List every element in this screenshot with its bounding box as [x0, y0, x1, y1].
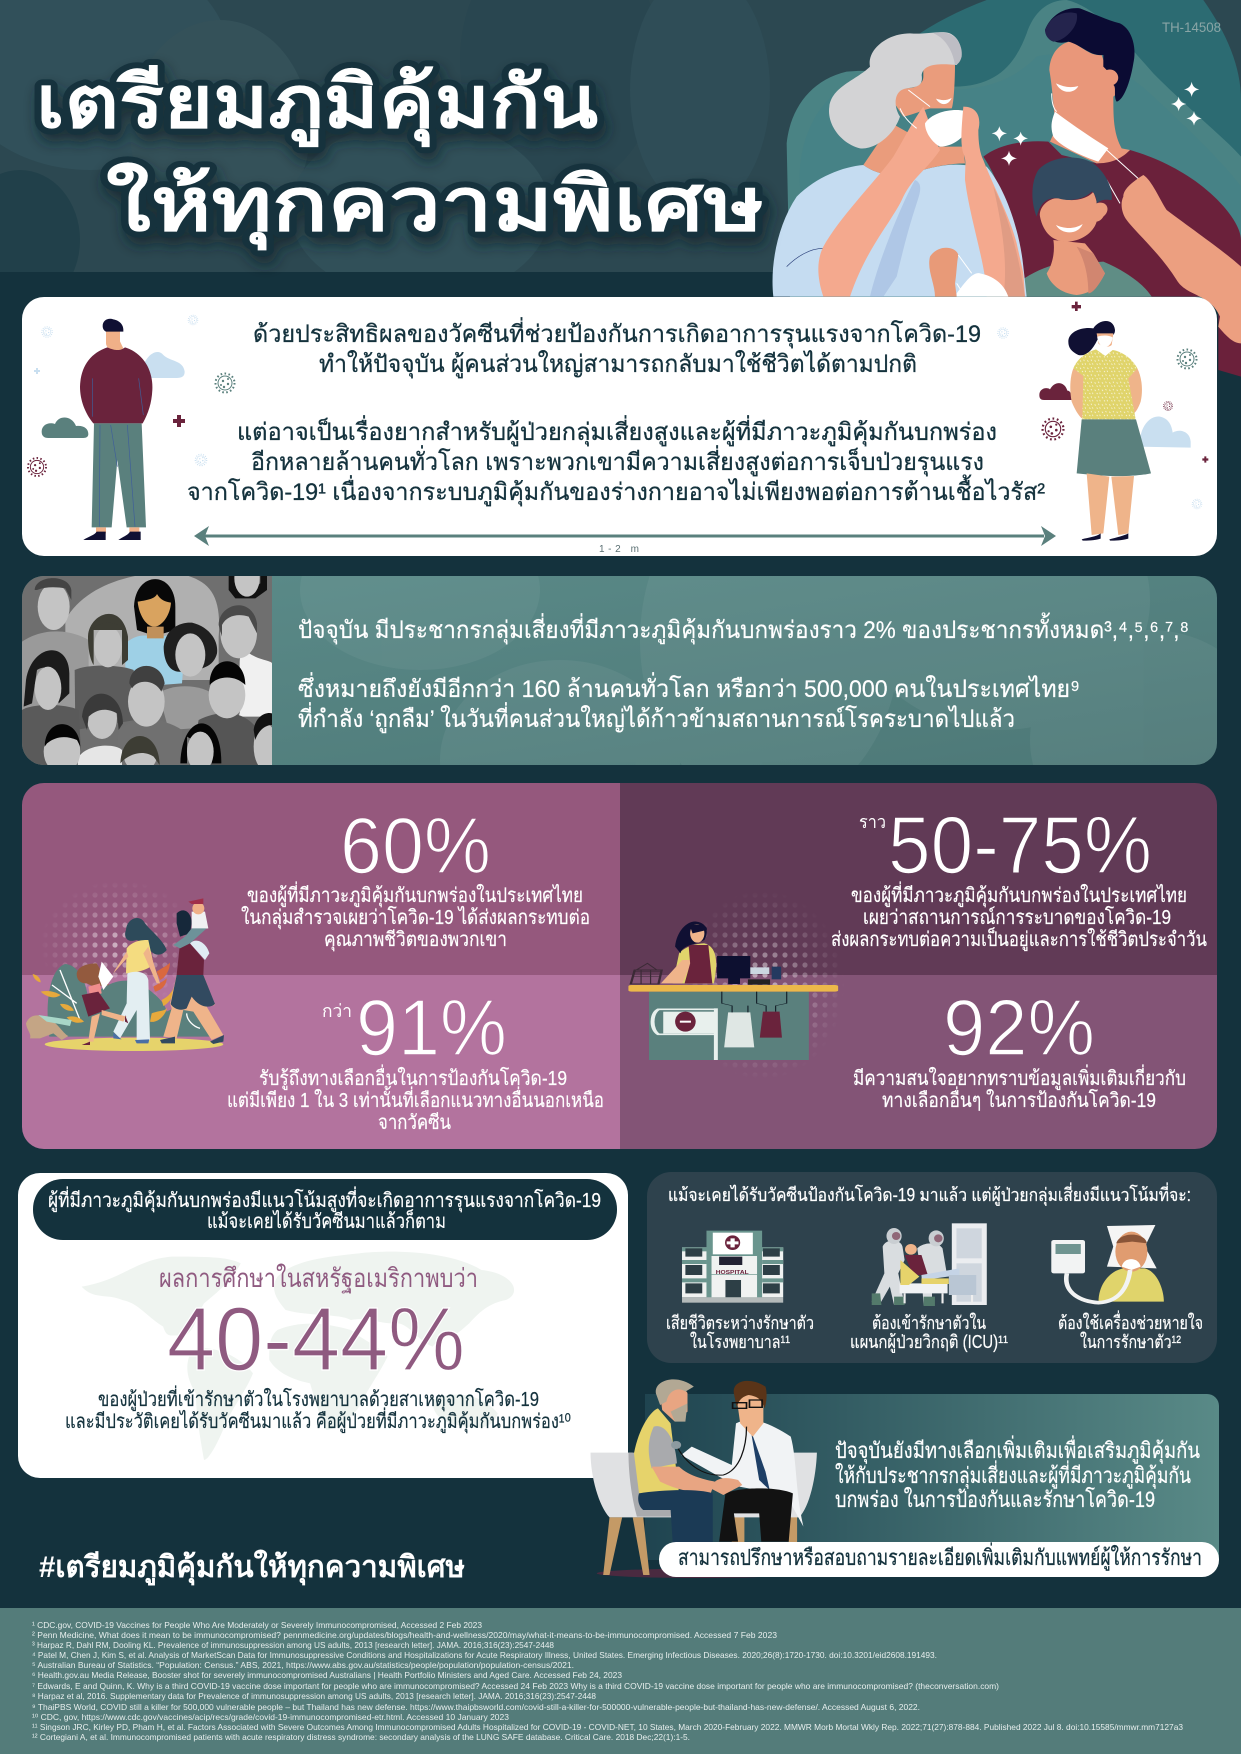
- stat: 91%: รับรู้ถึงทางเลือกอื่นในการป้องกันโควิด-19: [259, 1064, 567, 1091]
- icon: hospital: HOSPITAL: [716, 1270, 749, 1276]
- stat: 92%: มีความสนใจอยากทราบข้อมูลเพิ่มเติมเกี่ยวกับ: [853, 1064, 1186, 1091]
- references footer: ⁸ Harpaz et al, 2016. Supplementary data for Prevalence of immunosuppression among US adults, 2013 [research letter]. JAMA. 2016;316(23):2547-2448: [32, 1691, 596, 1701]
- stat: 91%: แต่มีเพียง 1 ใน 3 เท่านั้นที่เลือกแนวทางอื่นนอกเหนือ: [227, 1086, 604, 1112]
- icon: hospital: [682, 1231, 783, 1303]
- callout pill: ผู้ที่มีภาวะภูมิคุ้มกันบกพร่องมีแนวโน้มสูงที่จะเกิดอาการรุนแรงจากโควิด-19: [48, 1186, 601, 1213]
- icon: ventilator: [1051, 1225, 1164, 1303]
- grandmother mask: [925, 110, 972, 147]
- stat: 91%: กว่า: [322, 1001, 352, 1021]
- dog: [26, 1015, 68, 1040]
- title: เตรียมภูมิคุ้มกัน: [36, 63, 598, 148]
- father arm: [1122, 175, 1241, 343]
- callout pill: แม้จะเคยได้รับวัคซีนมาแล้วก็ตาม: [207, 1208, 446, 1233]
- consult pill: [659, 1542, 1219, 1577]
- study heading: ผลการศึกษาในสหรัฐอเมริกาพบว่า: [159, 1263, 478, 1294]
- girl: [77, 963, 110, 987]
- dad legs: [163, 975, 223, 1040]
- illustration: family walking: [26, 898, 224, 1051]
- illustration: doctor examining patient: [591, 1379, 817, 1578]
- outcome captions: ต้องเข้ารักษาตัวใน: [872, 1312, 986, 1333]
- outcome captions: ในการรักษาตัว¹²: [1080, 1331, 1181, 1352]
- distance arrow: 1-2 m: [599, 544, 639, 555]
- stat: 50-75%: 50-75%: [888, 800, 1152, 891]
- father mask: [1052, 112, 1108, 162]
- patient: [634, 1408, 679, 1493]
- stat: 91%: 91%: [356, 983, 507, 1072]
- references footer: ⁴ Patel M, Chen J, Kim S, et al. Analysis of MarketScan Data for Immunosuppressive Conditions and Hospitalizations for Acute Respiratory Illness, United States. Emerging Infectious Diseases. 2020;26(8):1720-1730. doi:10.3201/eid2608.191493.: [32, 1650, 937, 1660]
- study description: และมีประวัติเคยได้รับวัคซีนมาแล้ว คือผู้ป่วยที่มีภาวะภูมิคุ้มกันบกพร่อง¹⁰: [65, 1407, 571, 1434]
- options text: บกพร่อง ในการป้องกันและรักษาโควิด-19: [835, 1487, 1155, 1512]
- panel: severe outcomes: [647, 1172, 1217, 1363]
- header background: [0, 0, 1241, 272]
- child on shoulders: [192, 912, 208, 930]
- references footer: ⁷ Edwards, E and Quinn, K. Why is a third COVID-19 vaccine dose important for people who are immunocompromised? Accessed 24 Feb 2023 Why is a third COVID-19 vaccine dose important for people who are immunocompromised? (theconversation.com): [32, 1681, 999, 1691]
- grandmother hair: [829, 32, 961, 148]
- illustration: woman with mask: [1039, 302, 1208, 541]
- grandmother arm and hand: [818, 107, 940, 297]
- stat: 92%: ทางเลือกอื่นๆ ในการป้องกันโควิด-19: [882, 1086, 1156, 1112]
- heads: [38, 583, 70, 630]
- at-risk text: ที่กำลัง ‘ถูกลืม’ ในวันที่คนส่วนใหญ่ได้ก้าวข้ามสถานการณ์โรคระบาดไปแล้ว: [298, 702, 1015, 734]
- panel: intro white card: [22, 297, 1217, 556]
- outcome captions: [666, 1310, 1203, 1353]
- at-risk text: ปัจจุบัน มีประชากรกลุ่มเสี่ยงที่มีภาวะภูมิคุ้มกันบกพร่องราว 2% ของประชากรทั้งหมด³,⁴,⁵,⁶,⁷,⁸: [298, 612, 1189, 645]
- decorative viruses and plus marks: [28, 315, 1202, 509]
- references footer: ⁵ Australian Bureau of Statistics. “Population: Census.” ABS, 2021, https://www.abs.gov.au/statistics/people/population/population-census/2021.: [32, 1660, 574, 1670]
- sparkles: [992, 82, 1202, 166]
- stat: 92%: 92%: [943, 983, 1095, 1072]
- child shirt: [1005, 262, 1152, 297]
- stat: 91%: [227, 983, 604, 1134]
- icon: ICU bed with medical staff: [872, 1223, 987, 1306]
- outcome captions: เสียชีวิตระหว่างรักษาตัว: [666, 1313, 814, 1333]
- title: ให้ทุกความพิเศษ: [106, 161, 764, 251]
- stat: 60%: ในกลุ่มสำรวจเผยว่าโควิด-19 ได้ส่งผลกระทบต่อ: [241, 906, 590, 930]
- illustration: shop counter and cashier: [628, 921, 838, 1060]
- halftone dots: [40, 880, 845, 1080]
- mum: [125, 918, 167, 955]
- at-risk text: [298, 612, 1189, 734]
- child face: [1040, 192, 1108, 242]
- distance arrow: [194, 526, 1056, 555]
- references footer: ¹⁰ CDC, gov, https://www.cdc.gov/vaccines/acip/recs/grade/covid-19-immunocompromised-etr.html. Accessed 10 January 2023: [32, 1712, 509, 1722]
- study description: ของผู้ป่วยที่เข้ารักษาตัวในโรงพยาบาลด้วยสาเหตุจากโควิด-19: [98, 1385, 539, 1412]
- lower hand and mask: [929, 248, 958, 297]
- references footer: [0, 1608, 1241, 1754]
- world map watermark: [82, 1252, 514, 1460]
- father hair: [1045, 8, 1135, 102]
- intro text: ทำให้ปัจจุบัน ผู้คนส่วนใหญ่สามารถกลับมาใช้ชีวิตได้ตามปกติ: [319, 350, 917, 379]
- stat: 60%: 60%: [340, 801, 491, 890]
- references footer: ¹ CDC.gov, COVID-19 Vaccines for People Who Are Moderately or Severely Immunocompromised, Accessed 2 Feb 2023: [32, 1620, 482, 1630]
- intro text: จากโควิด-19¹ เนื่องจากระบบภูมิคุ้มกันของร่างกายอาจไม่เพียงพอต่อการต้านเชื้อไวรัส²: [187, 474, 1045, 507]
- illustration: crowd: [22, 576, 272, 765]
- illustration: man with mask: [42, 319, 185, 540]
- panel: additional options: [591, 1379, 1219, 1578]
- intro text: [187, 317, 1045, 507]
- panel: study result card: [18, 1173, 628, 1478]
- title: [36, 63, 764, 251]
- stat: 50-75%: ของผู้ที่มีภาวะภูมิคุ้มกันบกพร่องในประเทศไทย: [851, 881, 1187, 908]
- references footer: ⁹ ThaiPBS World, COVID still a killer for 500,000 vulnerable people – but Thailand has new defense. https://www.thaipbsworld.com/covid-still-a-killer-for-500000-vulnerable-people-but-thailand-has-new-defense/. Accessed August 6, 2022.: [32, 1702, 920, 1712]
- outcome captions: แผนกผู้ป่วยวิกฤติ (ICU)¹¹: [850, 1332, 1008, 1353]
- document code: TH-14508: [1162, 19, 1221, 35]
- father shirt: [983, 141, 1241, 377]
- grandmother neck: [863, 123, 965, 175]
- references footer: ⁶ Health.gov.au Media Release, Booster shot for severely immunocompromised Australians | Health Portfolio Ministers and Aged Care. Accessed Feb 24, 2023: [32, 1670, 622, 1680]
- illustration: grandmother, father and child with masks: [773, 0, 1241, 377]
- references footer: ¹¹ Singson JRC, Kirley PD, Pham H, et al. Factors Associated with Severe Outcomes Among Immunocompromised Adults Hospitalized for COVID-19 - COVID-NET, 10 States, March 2020-February 2022. MMWR Morb Mortal Wkly Rep. 2022;71(27):878-884. Published 2022 Jul 8. doi:10.15585/mmwr.mm7127a3: [32, 1722, 1183, 1732]
- dad torso: [177, 943, 204, 975]
- stat: 40-44%: 40-44%: [167, 1290, 465, 1390]
- stat: 60%: ของผู้ที่มีภาวะภูมิคุ้มกันบกพร่องในประเทศไทย: [247, 881, 583, 908]
- stat: 50-75%: [831, 800, 1207, 952]
- stat: 50-75%: ราว: [859, 812, 886, 832]
- intro text: อีกหลายล้านคนทั่วโลก เพราะพวกเขามีความเสี่ยงสูงต่อการเจ็บป่วยรุนแรง: [251, 445, 984, 477]
- grandmother body: [773, 165, 1027, 297]
- outcome captions: ต้องใช้เครื่องช่วยหายใจ: [1058, 1310, 1203, 1333]
- stat: 60%: [241, 801, 590, 952]
- at-risk text: ซึ่งหมายถึงยังมีอีกกว่า 160 ล้านคนทั่วโลก หรือกว่า 500,000 คนในประเทศไทย⁹: [298, 672, 1080, 703]
- study description: [65, 1385, 571, 1434]
- hashtag: #เตรียมภูมิคุ้มกันให้ทุกความพิเศษ: [39, 1549, 465, 1586]
- stat: 50-75%: เผยว่าสถานการณ์การระบาดของโควิด-19: [863, 906, 1171, 929]
- outcome captions: ในโรงพยาบาล¹¹: [690, 1331, 790, 1352]
- intro text: แต่อาจเป็นเรื่องยากสำหรับผู้ป่วยกลุ่มเสี่ยงสูงและผู้ที่มีภาวะภูมิคุ้มกันบกพร่อง: [237, 415, 997, 447]
- stat: 60%: คุณภาพชีวิตของพวกเขา: [324, 929, 507, 952]
- panel: at-risk population: [22, 576, 1217, 765]
- options text: [835, 1435, 1200, 1512]
- stat: 92%: [853, 983, 1186, 1112]
- references footer: ² Penn Medicine, What does it mean to be immunocompromised? pennmedicine.org/updates/blogs/health-and-wellness/2020/may/what-it-means-to-be-immunocompromised. Accessed 7 Feb 2023: [32, 1630, 777, 1640]
- grandmother face: [893, 64, 955, 117]
- child hair: [1032, 158, 1112, 217]
- father face: [1049, 42, 1130, 163]
- chairs: [591, 1453, 679, 1517]
- doctor: [681, 1420, 803, 1527]
- references footer: ³ Harpaz R, Dahl RM, Dooling KL. Prevalence of immunosuppression among US adults, 2013 [research letter]. JAMA. 2016;316(23):2547-2448: [32, 1640, 554, 1650]
- panel: survey statistics: [0, 783, 1241, 1754]
- callout pill: [33, 1179, 617, 1240]
- references footer: ¹² Cortegiani A, et al. Immunocompromised patients with acute respiratory distress syndrome: secondary analysis of the LUNG SAFE database. Critical Care. 2018 Dec;22(1):1-5.: [32, 1732, 690, 1742]
- stat: 91%: จากวัคซีน: [378, 1112, 451, 1134]
- intro text: ด้วยประสิทธิผลของวัคซีนที่ช่วยป้องกันการเกิดอาการรุนแรงจากโควิด-19: [253, 317, 981, 349]
